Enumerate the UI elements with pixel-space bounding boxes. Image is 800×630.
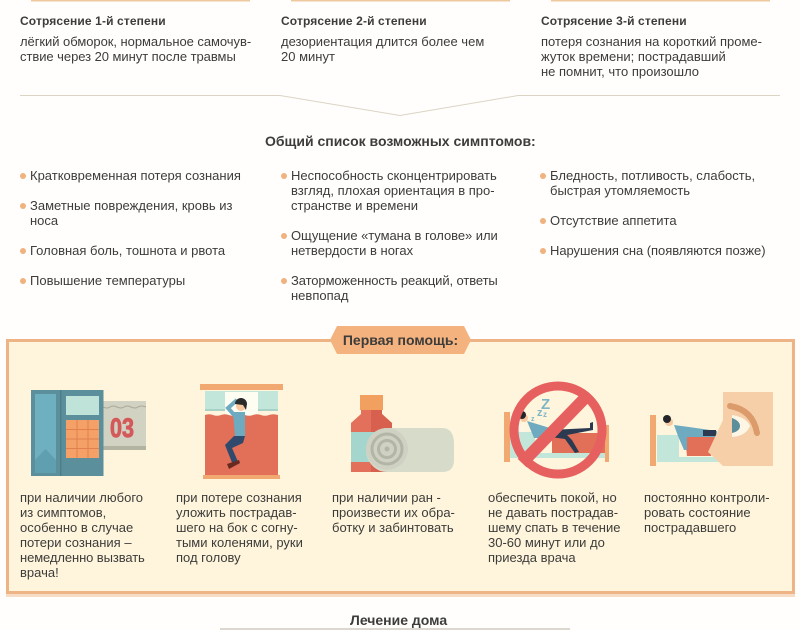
degree 1 text: Сотрясение 1-й степени: [20, 14, 166, 28]
step 5 text: ровать состояние: [644, 505, 751, 520]
symptoms column 3: Отсутствие аппетита: [550, 213, 677, 228]
degree 1 text: ствие через 20 минут после травмы: [20, 49, 236, 64]
step 5 text: [644, 490, 770, 535]
symptoms column 2: Ощущение «тумана в голове» или: [291, 228, 498, 243]
symptoms heading: Общий список возможных симптомов:: [265, 133, 536, 149]
icon: no sleeping sign: z: [543, 410, 547, 419]
icon: telephone: [31, 390, 146, 476]
symptoms column 2: невпопад: [291, 288, 348, 303]
step 2 text: шего на бок с согну-: [176, 520, 298, 535]
symptoms column 3: [540, 168, 766, 258]
step 4 text: обеспечить покой, но: [488, 490, 617, 505]
symptoms column 2: Заторможенность реакций, ответы: [291, 273, 498, 288]
symptoms column 2: странстве и времени: [291, 198, 418, 213]
degree 2 text: дезориентация длится более чем: [281, 34, 484, 49]
symptoms column 1: Заметные повреждения, кровь из: [30, 198, 233, 213]
icon: no sleeping sign: [504, 382, 609, 478]
icon: telephone: 03: [110, 413, 134, 443]
step 4 text: не давать пострадав-: [488, 505, 618, 520]
symptoms column 3: Бледность, потливость, слабость,: [550, 168, 755, 183]
symptoms column 1: Кратковременная потеря сознания: [30, 168, 241, 183]
symptoms column 2: нетвердости в ногах: [291, 243, 413, 258]
symptoms column 3: Нарушения сна (появляются позже): [550, 243, 766, 258]
step 2 text: под голову: [176, 550, 241, 565]
step 3 text: [332, 490, 455, 535]
symptoms column 2: [281, 168, 498, 303]
degree 3 text: потеря сознания на короткий проме-: [541, 34, 762, 49]
step 4 text: [488, 490, 620, 565]
step 1 text: особенно в случае: [20, 520, 133, 535]
degree 1 text: лёгкий обморок, нормальное самочув-: [20, 34, 251, 49]
step 2 text: [176, 490, 303, 565]
first aid badge: [330, 326, 470, 354]
icon: no sleeping sign: Z: [541, 396, 550, 413]
degree 3 text: жуток времени; пострадавший: [541, 49, 726, 64]
icon: no sleeping sign: z: [531, 416, 535, 423]
step 1 text: немедленно вызвать: [20, 550, 145, 565]
degree 2 text: Сотрясение 2-й степени: [281, 14, 427, 28]
step 3 text: произвести их обра-: [332, 505, 455, 520]
symptoms column 2: Неспособность сконцентрировать: [291, 168, 497, 183]
icon: no sleeping sign: z: [537, 407, 543, 419]
step 5 text: пострадавшего: [644, 520, 736, 535]
step 1 text: [20, 490, 145, 580]
symptoms column 1: [20, 168, 241, 288]
symptoms column 1: Головная боль, тошнота и рвота: [30, 243, 225, 258]
symptoms column 1: носа: [30, 213, 58, 228]
icon: patient on bed: [200, 384, 283, 479]
step 5 text: постоянно контроли-: [644, 490, 770, 505]
top card edges and chevron divider: [20, 0, 780, 116]
degree 3 text: не помнит, что произошло: [541, 64, 699, 79]
symptoms column 3: быстрая утомляемость: [550, 183, 690, 198]
degree 2 text: 20 минут: [281, 49, 335, 64]
degree 2 text: [281, 14, 484, 64]
step 4 text: шему спать в течение: [488, 520, 620, 535]
step 2 text: при потере сознания: [176, 490, 302, 505]
degree 3 text: [541, 14, 762, 79]
step 1 text: из симптомов,: [20, 505, 106, 520]
degree 1 text: [20, 14, 251, 64]
icon: watching patient: [650, 392, 773, 466]
home treatment heading: Лечение дома: [350, 612, 447, 628]
step 3 text: ботку и забинтовать: [332, 520, 454, 535]
step 1 text: при наличии любого: [20, 490, 143, 505]
step 2 text: уложить пострадав-: [176, 505, 297, 520]
first aid badge: Первая помощь:: [343, 332, 458, 348]
panel: first aid: [6, 339, 795, 594]
step 1 text: потери сознания –: [20, 535, 132, 550]
step 1 text: врача!: [20, 565, 59, 580]
step 4 text: 30-60 минут или до: [488, 535, 605, 550]
symptoms column 1: Повышение температуры: [30, 273, 185, 288]
step 4 text: приезда врача: [488, 550, 576, 565]
step 2 text: тыми коленями, руки: [176, 535, 303, 550]
icon: medicine bottle and bandage: [351, 395, 454, 472]
symptoms column 2: взгляд, плохая ориентация в про-: [291, 183, 495, 198]
step 3 text: при наличии ран -: [332, 490, 441, 505]
degree 3 text: Сотрясение 3-й степени: [541, 14, 687, 28]
